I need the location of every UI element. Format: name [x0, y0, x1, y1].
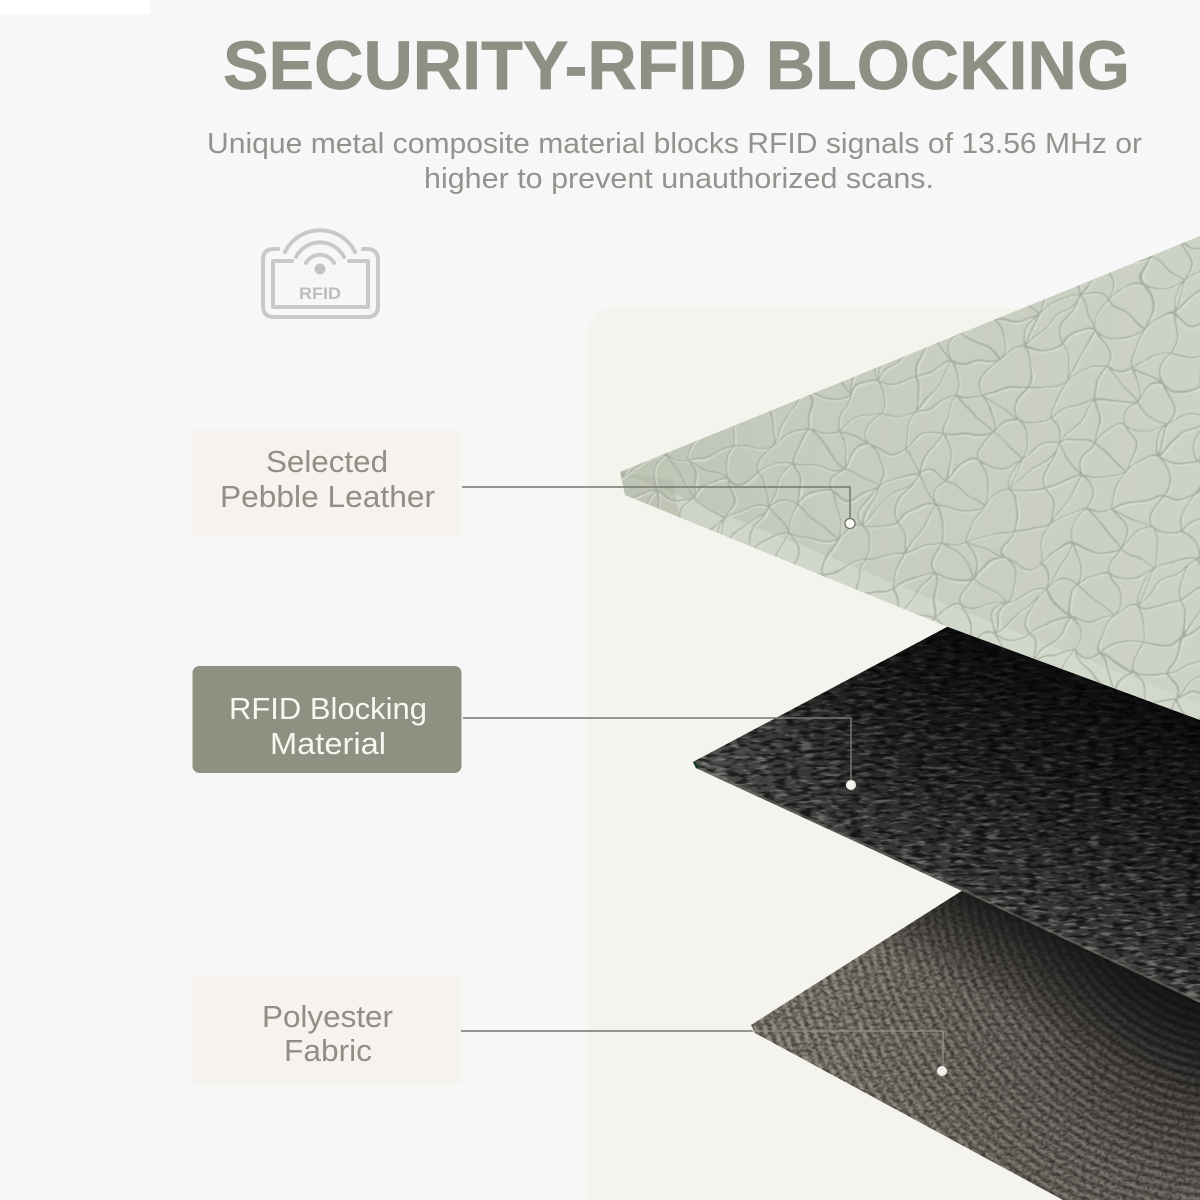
subtitle: higher to prevent unauthorized scans. [424, 163, 934, 195]
label: selected pebble leather: Selected [266, 444, 388, 479]
callout: leather leader line [462, 487, 855, 528]
label: RFID blocking material [192, 666, 462, 773]
material layer: polyester fabric [740, 880, 1200, 1200]
label: RFID blocking material: RFID Blocking [229, 691, 427, 726]
cream panel behind material layers [588, 308, 1200, 1200]
subtitle: Unique metal composite material blocks RFID signals of 13.56 MHz or [207, 128, 1142, 160]
top-left white strip [0, 0, 150, 14]
label: polyester fabric [192, 977, 461, 1084]
title: SECURITY-RFID BLOCKING [223, 27, 1130, 104]
label: polyester fabric: Polyester [262, 999, 393, 1034]
icon: RFID: RFID [299, 285, 341, 303]
material layer: RFID blocking material [680, 615, 1200, 1020]
label: polyester fabric: Fabric [284, 1033, 372, 1068]
material layer: pebble leather [620, 236, 1200, 720]
label: selected pebble leather: Pebble Leather [220, 479, 435, 514]
icon: RFID [263, 230, 378, 317]
label: selected pebble leather [192, 429, 461, 536]
subtitle [207, 128, 1142, 195]
label: RFID blocking material: Material [270, 726, 386, 761]
callout: RFID layer leader line [463, 718, 856, 790]
callout: fabric leader line [461, 1031, 947, 1076]
